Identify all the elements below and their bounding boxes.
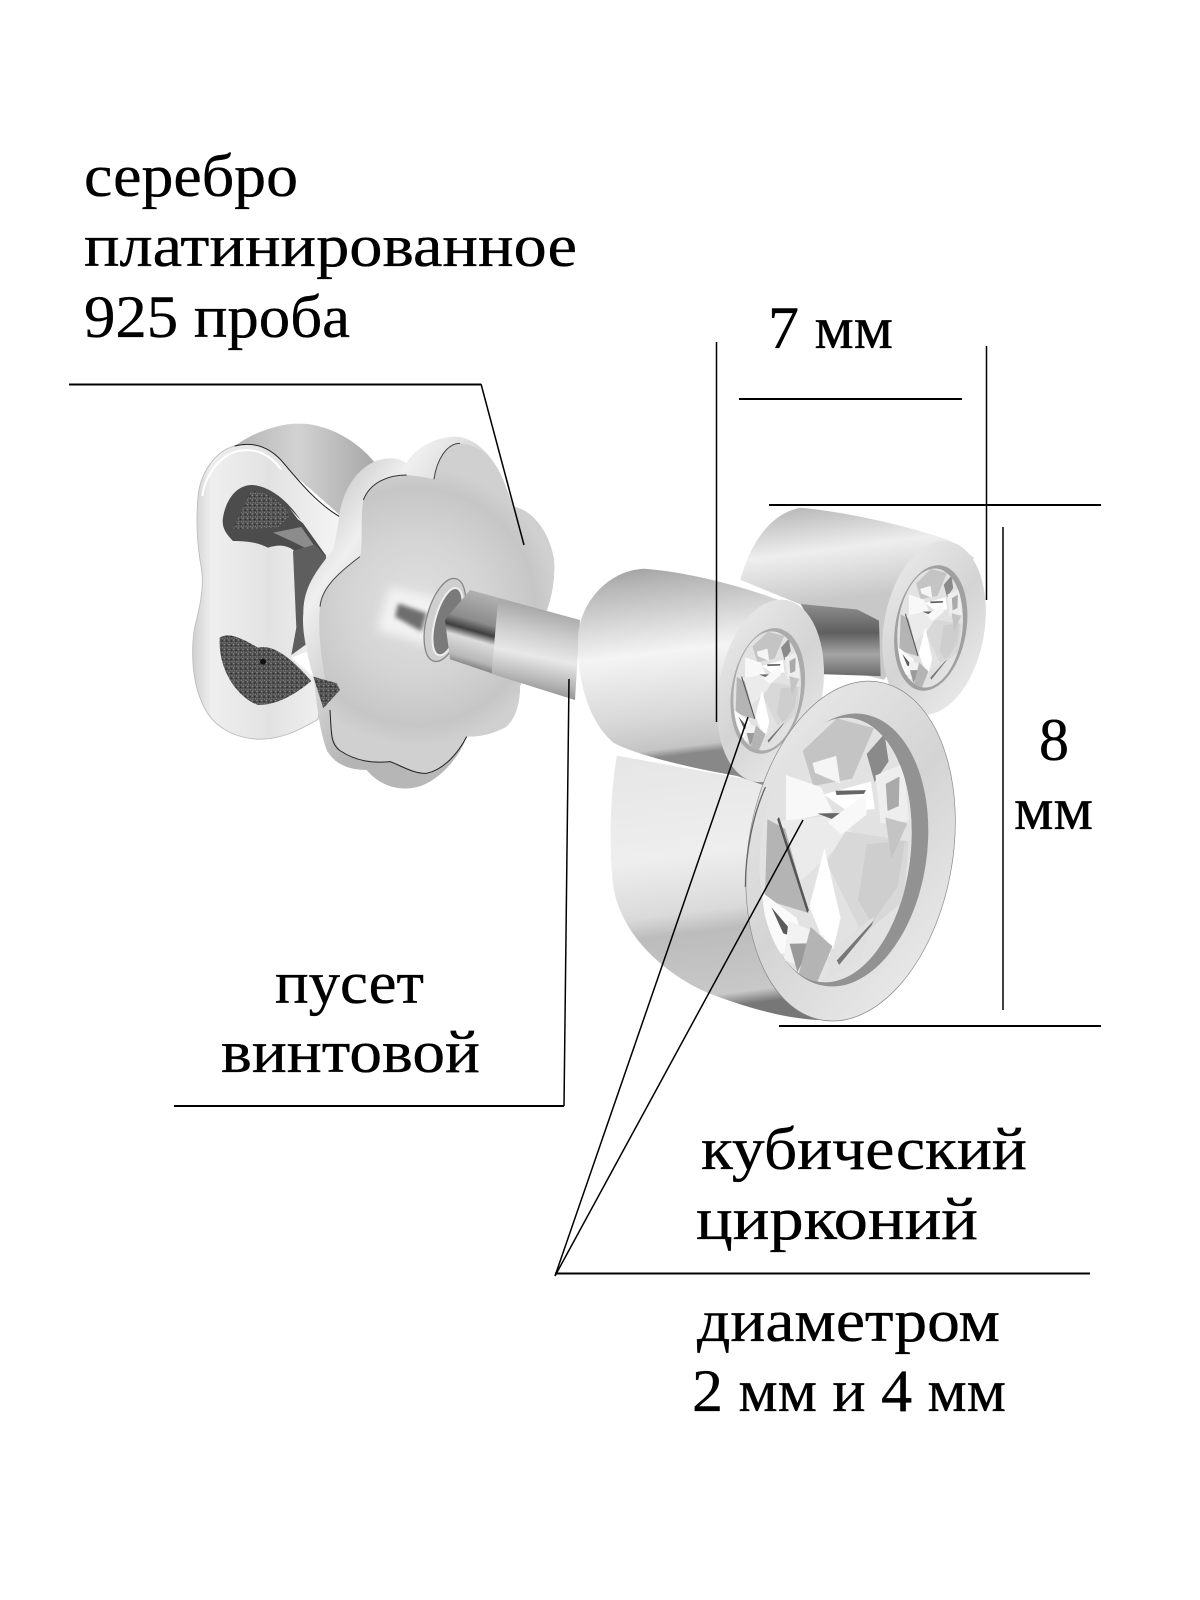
label: stone diameter (692, 1288, 1006, 1424)
post and collar (416, 574, 580, 700)
label: cubic zirconia (696, 1116, 1027, 1252)
screw back: flower disc (303, 437, 554, 788)
height dimension lines (769, 505, 1101, 1026)
label: height 8 mm: 8 (1039, 707, 1069, 773)
width dimension lines (716, 342, 986, 722)
label: stone diameter: 2 мм и 4 мм (692, 1358, 1006, 1424)
leader lines: cubic zirconia (555, 717, 1090, 1276)
label: screw back: винтовой (221, 1019, 480, 1085)
label: silver: 925 проба (84, 284, 350, 350)
top-right bezel (740, 508, 1000, 726)
label: height 8 mm: мм (1014, 776, 1093, 842)
label: screw back: пусет (275, 950, 424, 1016)
earring illustration (193, 424, 1000, 1043)
label: height 8 mm (1014, 707, 1093, 842)
studs: three bezel-set stones (578, 508, 1000, 1043)
nut holes (220, 485, 326, 705)
label: silver: серебро (84, 143, 298, 209)
leader line: silver (69, 384, 524, 545)
label: cubic zirconia: кубический (701, 1116, 1027, 1182)
label: cubic zirconia: цирконий (696, 1186, 978, 1252)
label: stone diameter: диаметром (697, 1288, 1000, 1354)
infographic canvas (69, 152, 1101, 1412)
large bezel ring and stone (719, 659, 983, 1043)
label: width 7 mm: 7 мм (768, 295, 893, 361)
label: screw back (221, 950, 480, 1085)
label: silver: платинированное (84, 213, 577, 279)
leader line: screw back (174, 679, 569, 1106)
screw back: nut (193, 424, 375, 739)
left bezel (578, 569, 838, 793)
label: silver (84, 143, 577, 350)
large bezel body (611, 756, 884, 1020)
